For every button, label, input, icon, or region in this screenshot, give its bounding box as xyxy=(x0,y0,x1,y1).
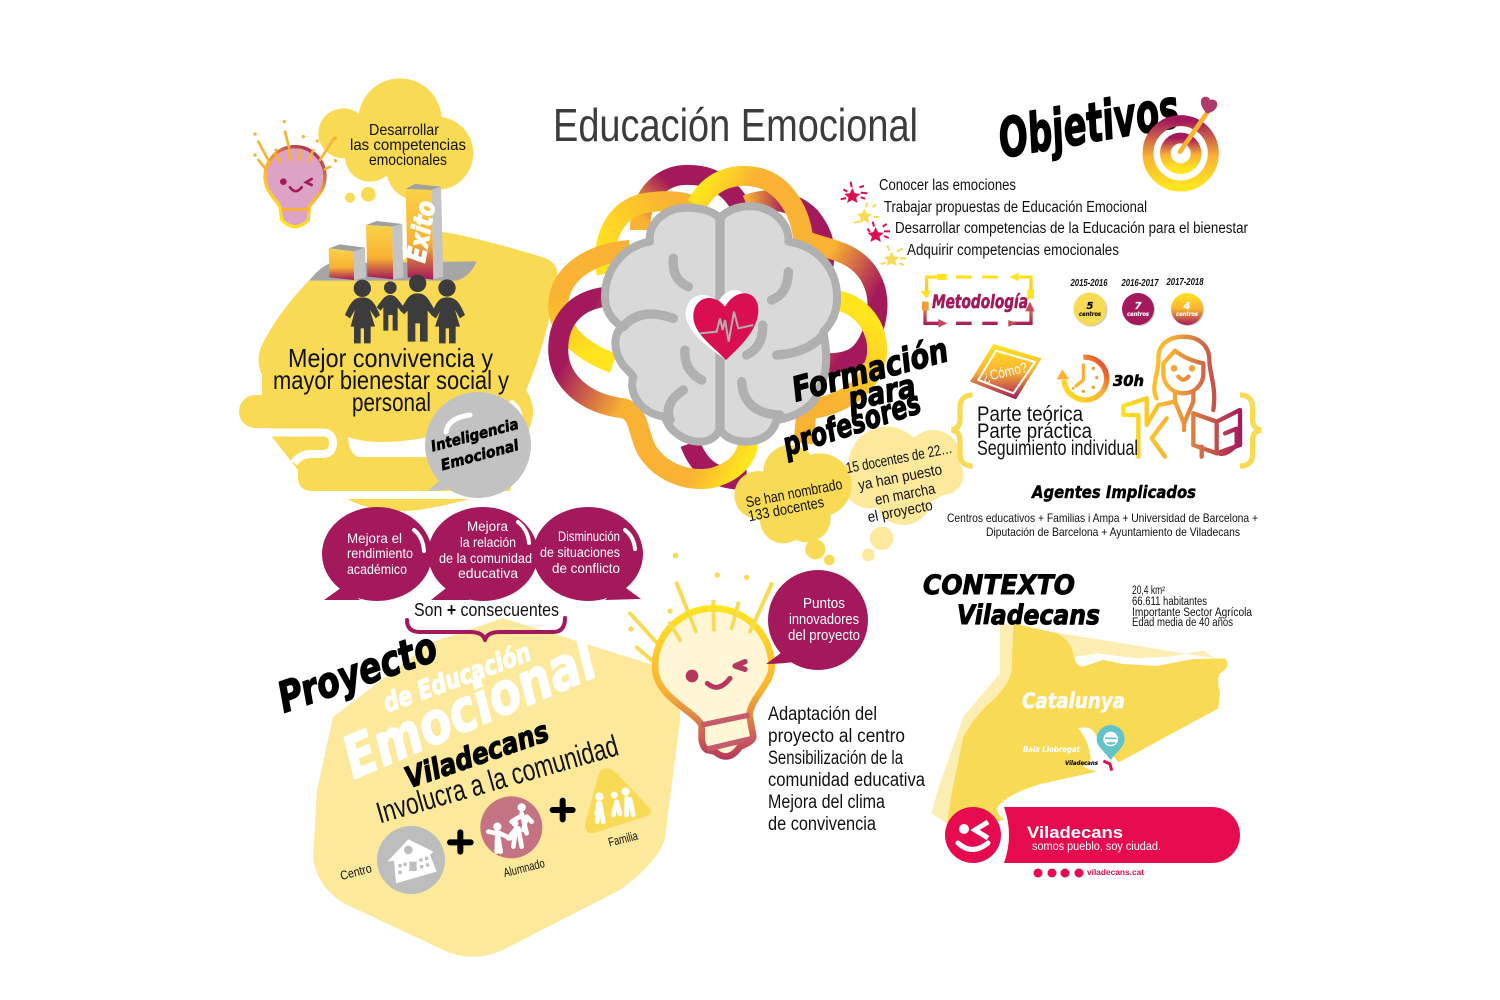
labels: map: Catalunya xyxy=(1022,689,1125,713)
icons: stars xyxy=(841,182,906,266)
heading: objetivos: Objetivos xyxy=(994,77,1184,171)
speech bubbles: consecuencias: rendimiento xyxy=(347,545,413,561)
timeline: centres by year: 5 xyxy=(1087,301,1094,312)
panel: metodología arrows xyxy=(921,273,1035,328)
cloud text: Desarrollar xyxy=(369,122,440,139)
panel: proyecto hexagon xyxy=(313,618,680,957)
heading: proyecto de educación emocional: Emocional xyxy=(333,625,607,792)
list: objetivos: Desarrollar competencias de la Educación para el bienestar xyxy=(895,220,1248,237)
icon: cómo label xyxy=(970,344,1042,399)
braces xyxy=(952,395,1261,466)
heading: formación para profesores xyxy=(777,330,953,464)
speech bubbles: consecuencias: académico xyxy=(347,561,407,577)
text: agentes list: Diputación de Barcelona + Ayuntamiento de Viladecans xyxy=(986,525,1240,539)
list: objetivos: Adquirir competencias emocionales xyxy=(907,242,1119,259)
speech bubbles: consecuencias: de conflicto xyxy=(552,560,620,576)
text: docentes clouds: el proyecto xyxy=(866,497,934,526)
timeline: centres by year: centros xyxy=(1127,311,1149,318)
label: metodología: Metodología xyxy=(932,291,1028,313)
text: puntos innovadores list: de convivencia xyxy=(768,814,876,835)
text: data facts: 20,4 km² xyxy=(1132,585,1165,597)
logo: viladecans: somos pueblo, soy ciudad. xyxy=(1032,841,1161,853)
logo: viladecans xyxy=(945,807,1240,863)
labels: map: Viladecans xyxy=(1065,760,1098,767)
text: involucra a la comunidad: Involucra a la comunidad xyxy=(373,730,622,830)
speech bubbles: consecuencias: de la comunidad xyxy=(439,550,532,566)
logo: viladecans: Viladecans xyxy=(1027,823,1123,842)
social links xyxy=(1034,868,1144,878)
icons: centro, alumnado, familia xyxy=(377,768,651,894)
labels: participants: Alumnado xyxy=(502,856,546,880)
text: cómo list xyxy=(977,403,1138,460)
text: mejor convivencia: Mejor convivencia y xyxy=(288,343,493,373)
brace: consequences xyxy=(407,618,565,640)
graphic: interlaced ribbons xyxy=(558,175,877,480)
icon: target with dart xyxy=(1148,97,1217,186)
heading: proyecto de educación emocional: de Educación xyxy=(379,638,535,719)
speech bubble: inteligencia emocional: Emocional xyxy=(439,436,521,474)
speech bubbles: consecuencias: Mejora el xyxy=(347,530,402,546)
icon: heart with pulse xyxy=(686,290,758,360)
timeline: centres by year: 2015-2016 xyxy=(1070,277,1108,289)
heading: formación para profesores: para xyxy=(844,367,919,418)
speech bubbles: consecuencias: Mejora xyxy=(467,518,508,534)
speech bubble: puntos innovadores: del proyecto xyxy=(788,628,860,644)
timeline: centres by year: 4 xyxy=(1183,301,1191,312)
speech bubbles: consecuencias: Disminución xyxy=(558,528,620,544)
labels: map xyxy=(1022,689,1125,767)
speech bubbles: consecuencias xyxy=(322,507,643,601)
icon: woman reading xyxy=(1123,337,1240,457)
map: catalunya xyxy=(932,623,1227,827)
text: docentes clouds: 15 docentes de 22… xyxy=(845,440,954,477)
list: objetivos: Trabajar propuestas de Educación Emocional xyxy=(884,199,1147,216)
list: objetivos xyxy=(879,177,1248,259)
text: agentes list: Centros educativos + Familias i Ampa + Universidad de Barcelona + xyxy=(947,511,1258,525)
text: puntos innovadores list: proyecto al centro xyxy=(768,726,905,747)
text: puntos innovadores list: comunidad educativa xyxy=(768,770,925,791)
speech bubble: inteligencia emocional xyxy=(425,392,531,498)
heading: agentes implicados: Agentes Implicados xyxy=(1030,483,1196,503)
text: mejor convivencia: personal xyxy=(352,387,431,417)
speech bubble: puntos innovadores xyxy=(766,570,868,670)
speech bubbles: consecuencias: de situaciones xyxy=(540,544,620,560)
text: data facts: 66.611 habitantes xyxy=(1132,596,1207,608)
icon: brain xyxy=(605,206,837,442)
text: data facts: Importante Sector Agrícola xyxy=(1132,607,1253,619)
text: puntos innovadores list: Adaptación del xyxy=(768,704,877,725)
labels: participants: Familia xyxy=(607,829,639,850)
thought cloud: 133 docentes xyxy=(673,427,963,565)
text: mejor convivencia: mayor bienestar social y xyxy=(273,365,509,395)
timeline: centres by year: centros xyxy=(1176,311,1198,318)
timeline: centres by year xyxy=(1070,276,1204,326)
text: puntos innovadores list: Sensibilización de la xyxy=(768,748,903,769)
labels: map: Baix Llobregat xyxy=(1023,745,1081,754)
text: data facts xyxy=(1132,585,1253,629)
text: cómo list: Parte teórica xyxy=(977,403,1083,426)
text: son más consecuentes: Son + consecuentes xyxy=(414,600,559,620)
thought cloud: desarrollar las competencias xyxy=(318,78,473,203)
speech bubble: inteligencia emocional: Inteligencia xyxy=(429,415,521,456)
icon: clock xyxy=(1057,357,1107,400)
text: docentes clouds: ya han puesto xyxy=(857,461,943,494)
heading: formación para profesores: profesores xyxy=(777,383,925,464)
text: puntos innovadores list: Mejora del clima xyxy=(768,792,885,813)
labels: participants xyxy=(339,829,639,883)
cloud text: emocionales xyxy=(369,152,447,169)
heading: proyecto de educación emocional xyxy=(271,622,607,795)
text: docentes clouds: 133 docentes xyxy=(747,494,826,525)
list: objetivos: Conocer las emociones xyxy=(879,177,1016,194)
label: 30h: 30h xyxy=(1113,372,1144,390)
text: puntos innovadores list xyxy=(768,704,925,835)
text: cómo list: Seguimiento individual xyxy=(977,437,1138,460)
text: docentes clouds: en marcha xyxy=(874,480,937,509)
heading: contexto viladecans: CONTEXTO xyxy=(923,570,1075,601)
icon: small smiling light bulb xyxy=(253,120,337,227)
text: mejor convivencia xyxy=(273,343,509,417)
speech bubble: puntos innovadores: innovadores xyxy=(789,612,859,628)
icon: large smiling light bulb xyxy=(628,553,772,756)
title: Educación Emocional xyxy=(553,99,918,151)
timeline: centres by year: 2017-2018 xyxy=(1166,276,1204,288)
speech bubbles: consecuencias: la relación xyxy=(460,534,516,550)
label: éxito: Éxito xyxy=(400,198,442,265)
labels: participants: Centro xyxy=(339,861,373,883)
icon: family silhouettes xyxy=(345,275,465,343)
text: cómo list: Parte práctica xyxy=(977,420,1092,443)
cloud text: las competencias xyxy=(350,137,466,154)
speech bubble: puntos innovadores: Puntos xyxy=(803,596,845,612)
heading: formación para profesores: Formación xyxy=(788,330,953,410)
text: data facts: Edad media de 40 años xyxy=(1132,617,1233,629)
social links: viladecans.cat xyxy=(1087,868,1144,877)
speech bubbles: consecuencias: educativa xyxy=(458,565,518,581)
timeline: centres by year: centros xyxy=(1079,311,1101,318)
heading: proyecto de educación emocional: Proyecto xyxy=(271,622,443,722)
heading: contexto viladecans: Viladecans xyxy=(957,600,1100,631)
heading: proyecto de educación emocional: Viladecans xyxy=(400,714,553,795)
cloud text xyxy=(350,122,466,169)
text: agentes list xyxy=(947,511,1258,539)
text: docentes clouds: Se han nombrado xyxy=(744,476,844,511)
timeline: centres by year: 2016-2017 xyxy=(1121,277,1159,289)
heading: contexto viladecans xyxy=(923,570,1100,631)
icon: cómo label: ¿Cómo? xyxy=(981,359,1029,385)
panel: mejor convivencia yellow shape xyxy=(235,232,558,511)
chart: 3D success bars xyxy=(309,184,477,281)
text: docentes clouds xyxy=(744,440,954,526)
timeline: centres by year: 7 xyxy=(1135,301,1142,312)
